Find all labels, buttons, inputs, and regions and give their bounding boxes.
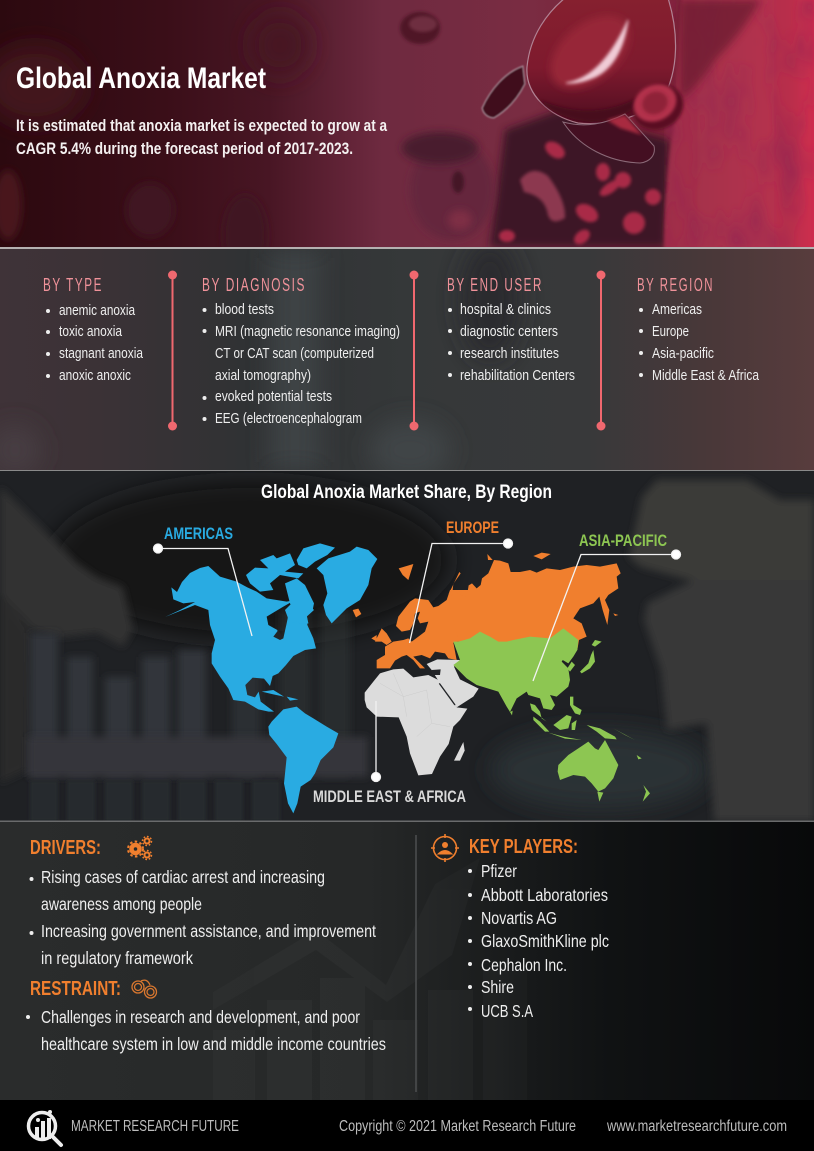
panel: drivers, restraint and key players background <box>0 822 814 1100</box>
heading: drivers: DRIVERS: <box>30 837 101 859</box>
icon: gears <box>128 836 152 860</box>
icon: side-on blood cell <box>482 66 525 118</box>
segment: by type: stagnant anoxia <box>59 346 144 362</box>
intro text <box>16 116 387 158</box>
label: Asia-Pacific: ASIA-PACIFIC <box>579 531 667 550</box>
panel: header banner <box>0 0 814 247</box>
panel: restraint: Challenges in research and development, and poor <box>41 1007 360 1027</box>
panel: drivers: awareness among people <box>41 894 202 914</box>
leader: Asia-Pacific <box>533 550 680 681</box>
region: Asia-Pacific <box>453 628 650 802</box>
label: Europe: EUROPE <box>446 518 499 537</box>
panel: map background <box>0 471 814 821</box>
segment: by end user: diagnostic centers <box>460 324 558 340</box>
segment: by diagnosis: MRI (magnetic resonance imaging) <box>215 324 400 340</box>
panel: key players: Novartis AG <box>481 908 557 928</box>
segment: by region: Europe <box>652 324 689 340</box>
label: Americas: AMERICAS <box>164 524 233 543</box>
region: Europe and Russia <box>353 553 621 668</box>
segment: by end user: hospital & clinics <box>460 302 551 318</box>
map title: Global Anoxia Market Share, By Region <box>261 482 552 503</box>
segment: by type: anoxic anoxic <box>59 368 131 384</box>
segment: by type: BY TYPE <box>43 274 103 295</box>
segment: by region: Asia-pacific <box>652 346 714 362</box>
segment: by end user: rehabilitation Centers <box>460 368 575 384</box>
region: Americas <box>165 543 377 813</box>
panel: key players: Shire <box>481 977 514 997</box>
leader: Middle East and Africa <box>372 701 380 782</box>
icon: lower blood cell <box>563 114 654 163</box>
segment: by diagnosis: BY DIAGNOSIS <box>202 274 306 295</box>
panel: segments <box>0 240 814 480</box>
region: Middle East and Africa <box>365 659 479 775</box>
heading: restraint: RESTRAINT: <box>30 978 121 1000</box>
panel: drivers: Increasing government assistance, and improvement <box>41 921 376 941</box>
intro text: It is estimated that anoxia market is expected to grow at a <box>16 116 387 135</box>
title: Global Anoxia Market <box>16 62 266 95</box>
panel: restraint <box>26 978 386 1054</box>
segment: by end user: BY END USER <box>447 274 543 295</box>
copyright: Copyright © 2021 Market Research Future <box>339 1118 576 1135</box>
segment: by diagnosis: axial tomography) <box>215 368 311 384</box>
panel: drivers: Rising cases of cardiac arrest and increasing <box>41 867 325 887</box>
segment: by diagnosis: blood tests <box>215 302 274 318</box>
segment: by end user <box>447 274 575 384</box>
leader: Americas <box>154 544 252 636</box>
segment: by region <box>637 274 760 384</box>
segment: by region: Americas <box>652 302 702 318</box>
company name: MARKET RESEARCH FUTURE <box>71 1118 239 1135</box>
panel: key players: Pfizer <box>481 861 517 881</box>
segment: by diagnosis: CT or CAT scan (computerized <box>215 346 374 362</box>
icon: small blood cell <box>631 83 685 130</box>
segment: by type: anemic anoxia <box>59 303 136 319</box>
panel: key players: Abbott Laboratories <box>481 885 608 905</box>
segment: by diagnosis: EEG (electroencephalogram <box>215 411 362 427</box>
icon: tissue wall <box>664 0 814 253</box>
icon: company logo <box>28 1110 61 1145</box>
panel: key players: UCB S.A <box>481 1001 533 1021</box>
panel: drivers: in regulatory framework <box>41 948 193 968</box>
segment: by diagnosis <box>202 274 400 427</box>
panel: key players: Cephalon Inc. <box>481 955 567 975</box>
icon: large blood cell <box>527 0 676 124</box>
icon: handcuffs <box>132 980 156 998</box>
panel: restraint: healthcare system in low and middle income countries <box>41 1034 386 1054</box>
heading: key players: KEY PLAYERS: <box>469 836 578 858</box>
segment: by type: toxic anoxia <box>59 324 123 340</box>
icon: key players target <box>431 834 459 862</box>
panel: key players <box>431 834 609 1021</box>
panel: key players: GlaxoSmithKline plc <box>481 931 609 951</box>
intro text: CAGR 5.4% during the forecast period of 2017-2023. <box>16 139 353 158</box>
segment: by region: BY REGION <box>637 274 714 295</box>
segment dividers <box>168 270 606 430</box>
segment: by end user: research institutes <box>460 346 559 362</box>
panel: drivers <box>30 836 376 968</box>
panel: footer <box>0 1100 814 1151</box>
label: Middle East and Africa: MIDDLE EAST & AFRICA <box>313 787 466 806</box>
segment: by type <box>43 274 144 384</box>
segment: by region: Middle East & Africa <box>652 368 760 384</box>
leader: Europe <box>410 539 512 643</box>
chart: world map <box>154 518 680 813</box>
segment: by diagnosis: evoked potential tests <box>215 389 332 405</box>
